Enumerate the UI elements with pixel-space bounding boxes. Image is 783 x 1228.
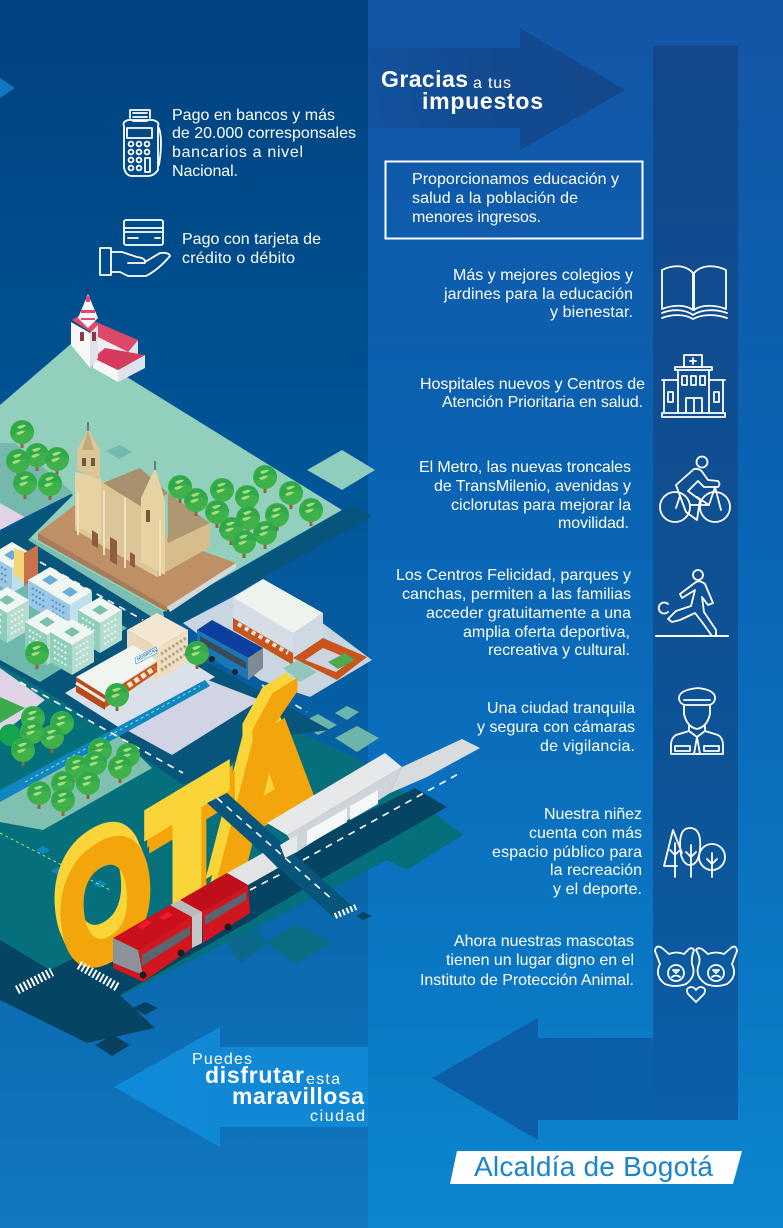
- illustration: cathedral on plaza: [38, 422, 236, 612]
- callout: education and health box: [386, 162, 642, 238]
- text: pago en bancos: bancarios a nivel: [172, 144, 303, 161]
- arrow: small left edge marker: [0, 78, 15, 98]
- text: schools: [443, 267, 633, 321]
- illustration: plaza mint block: [0, 343, 342, 612]
- text: hospitals: Hospitales nuevos y Centros de: [420, 376, 645, 393]
- heading: Gracias a tus impuestos: Gracias: [381, 66, 468, 92]
- illustration: crosswalks: [17, 907, 356, 990]
- text: hospitals: [420, 376, 645, 411]
- illustration: transit station: [227, 739, 480, 885]
- icon: hospital: [662, 355, 725, 417]
- text: parks: amplia oferta deportiva,: [463, 624, 630, 641]
- heading: Gracias a tus impuestos: a tus: [473, 75, 511, 92]
- text: children public space: [492, 806, 642, 898]
- text: schools: jardines para la educación: [443, 286, 633, 303]
- heading: Puedes disfrutar esta maravillosa ciudad: maravillosa: [232, 1083, 364, 1109]
- heading: Puedes disfrutar esta maravillosa ciudad: Puedes: [192, 1051, 252, 1068]
- icon: football player: [656, 570, 728, 636]
- text: children public space: la recreación: [550, 862, 642, 879]
- text: pago en bancos: Nacional.: [172, 163, 238, 180]
- icon: cyclist: [660, 456, 730, 522]
- illustration: blue bus: [197, 620, 263, 680]
- text: pago en bancos: de 20.000 corresponsales: [172, 125, 356, 142]
- text: security: [477, 700, 635, 755]
- icon: trees: [664, 828, 725, 877]
- text: parks: recreativa y cultural.: [488, 642, 630, 659]
- text: children public space: cuenta con más: [529, 825, 642, 842]
- illustration: red articulated bus: [113, 873, 257, 982]
- icon: police officer: [671, 688, 723, 754]
- text: children public space: espacio público para: [492, 844, 642, 861]
- illustration: 3D letter O: O: [43, 774, 156, 1002]
- callout: education and health box: salud a la población de: [412, 190, 578, 207]
- callout: education and health box: menores ingresos.: [412, 209, 541, 226]
- illustration: darker lawn and lilac corner: [0, 443, 165, 622]
- heading: Puedes disfrutar esta maravillosa ciudad: esta: [306, 1071, 340, 1088]
- illustration: 3D letter O: O: [46, 781, 159, 1009]
- text: children public space: y el deporte.: [553, 881, 642, 898]
- text: pago en bancos: Pago en bancos y más: [172, 107, 335, 124]
- illustration: 3D letter A with accent: Á: [210, 663, 308, 905]
- text: schools: y bienestar.: [550, 304, 633, 321]
- illustration: bike lane markers: [0, 833, 110, 890]
- logo: Alcaldía de Bogotá: Alcaldía de Bogotá: [474, 1151, 713, 1182]
- text: pets: Instituto de Protección Animal.: [420, 972, 634, 989]
- illustration: apartments block: [0, 542, 127, 682]
- text: parks: acceder gratuitamente a una: [426, 605, 631, 622]
- text: pago con tarjeta: crédito o débito: [182, 250, 295, 267]
- illustration: park trees: [0, 706, 140, 816]
- illustration: street blocks lower left: [0, 562, 307, 830]
- illustration: 3D letter A with accent: Á: [220, 669, 318, 911]
- heading: Gracias a tus impuestos: impuestos: [422, 88, 543, 114]
- text: pets: [420, 933, 634, 989]
- text: pago con tarjeta: Pago con tarjeta de: [182, 231, 321, 248]
- illustration: city ground: [0, 450, 463, 1056]
- background: left side: [0, 0, 368, 1228]
- text: pago en bancos: [172, 107, 356, 180]
- text: pets: Ahora nuestras mascotas: [454, 933, 634, 950]
- illustration: small church: [71, 286, 145, 382]
- icon: open book: [662, 266, 727, 319]
- text: schools: Más y mejores colegios y: [453, 267, 633, 284]
- icon: payment terminal: [124, 110, 161, 176]
- illustration: plaza trees: [6, 420, 323, 558]
- heading: Puedes disfrutar esta maravillosa ciudad: ciudad: [310, 1108, 365, 1125]
- text: security: y segura con cámaras: [477, 719, 635, 736]
- arrow: bottom left arrow: [114, 1027, 368, 1147]
- heading: Puedes disfrutar esta maravillosa ciudad: [192, 1051, 365, 1125]
- text: parks: Los Centros Felicidad, parques y: [396, 567, 631, 584]
- background: right panel: [368, 0, 783, 1228]
- callout: education and health box: Proporcionamos educación y: [412, 171, 619, 188]
- illustration: terminal block and building: [183, 579, 372, 697]
- text: metro: El Metro, las nuevas troncales: [419, 459, 631, 476]
- illustration: 3D letter A with accent: Á: [215, 666, 313, 908]
- illustration: 3D letter T: T: [151, 740, 229, 967]
- text: metro: movilidad.: [558, 515, 629, 532]
- text: metro: ciclorutas para mejorar la: [451, 497, 631, 514]
- illustration: hospital block: [25, 613, 215, 728]
- icon: hand with credit card: [100, 220, 170, 276]
- text: security: Una ciudad tranquila: [487, 700, 635, 717]
- illustration: 3D letter T: T: [148, 734, 226, 961]
- illustration: dark road network: [0, 493, 372, 785]
- icon: two dogs with heart: [655, 947, 737, 1002]
- text: metro: de TransMilenio, avenidas y: [434, 478, 631, 495]
- illustration: 3D letter O: O: [49, 788, 162, 1016]
- text: metro: [419, 459, 631, 532]
- illustration: hospital block: HOSPITAL: [136, 647, 158, 662]
- illustration: bridge road: [207, 773, 460, 917]
- illustration: 3D letter T: T: [153, 746, 231, 973]
- text: pago con tarjeta: [182, 231, 321, 267]
- text: parks: canchas, permiten a las familias: [402, 586, 631, 603]
- text: pets: tienen un lugar digno en el: [446, 952, 634, 969]
- text: hospitals: Atención Prioritaria en salud.: [442, 394, 643, 411]
- arrow: top arrow and vertical band and bottom arrow: [368, 28, 738, 1140]
- heading: Gracias a tus impuestos: [381, 66, 543, 114]
- text: children public space: Nuestra niñez: [544, 806, 642, 823]
- heading: Puedes disfrutar esta maravillosa ciudad: disfrutar: [205, 1062, 304, 1088]
- text: security: de vigilancia.: [540, 738, 635, 755]
- text: parks: [396, 567, 631, 659]
